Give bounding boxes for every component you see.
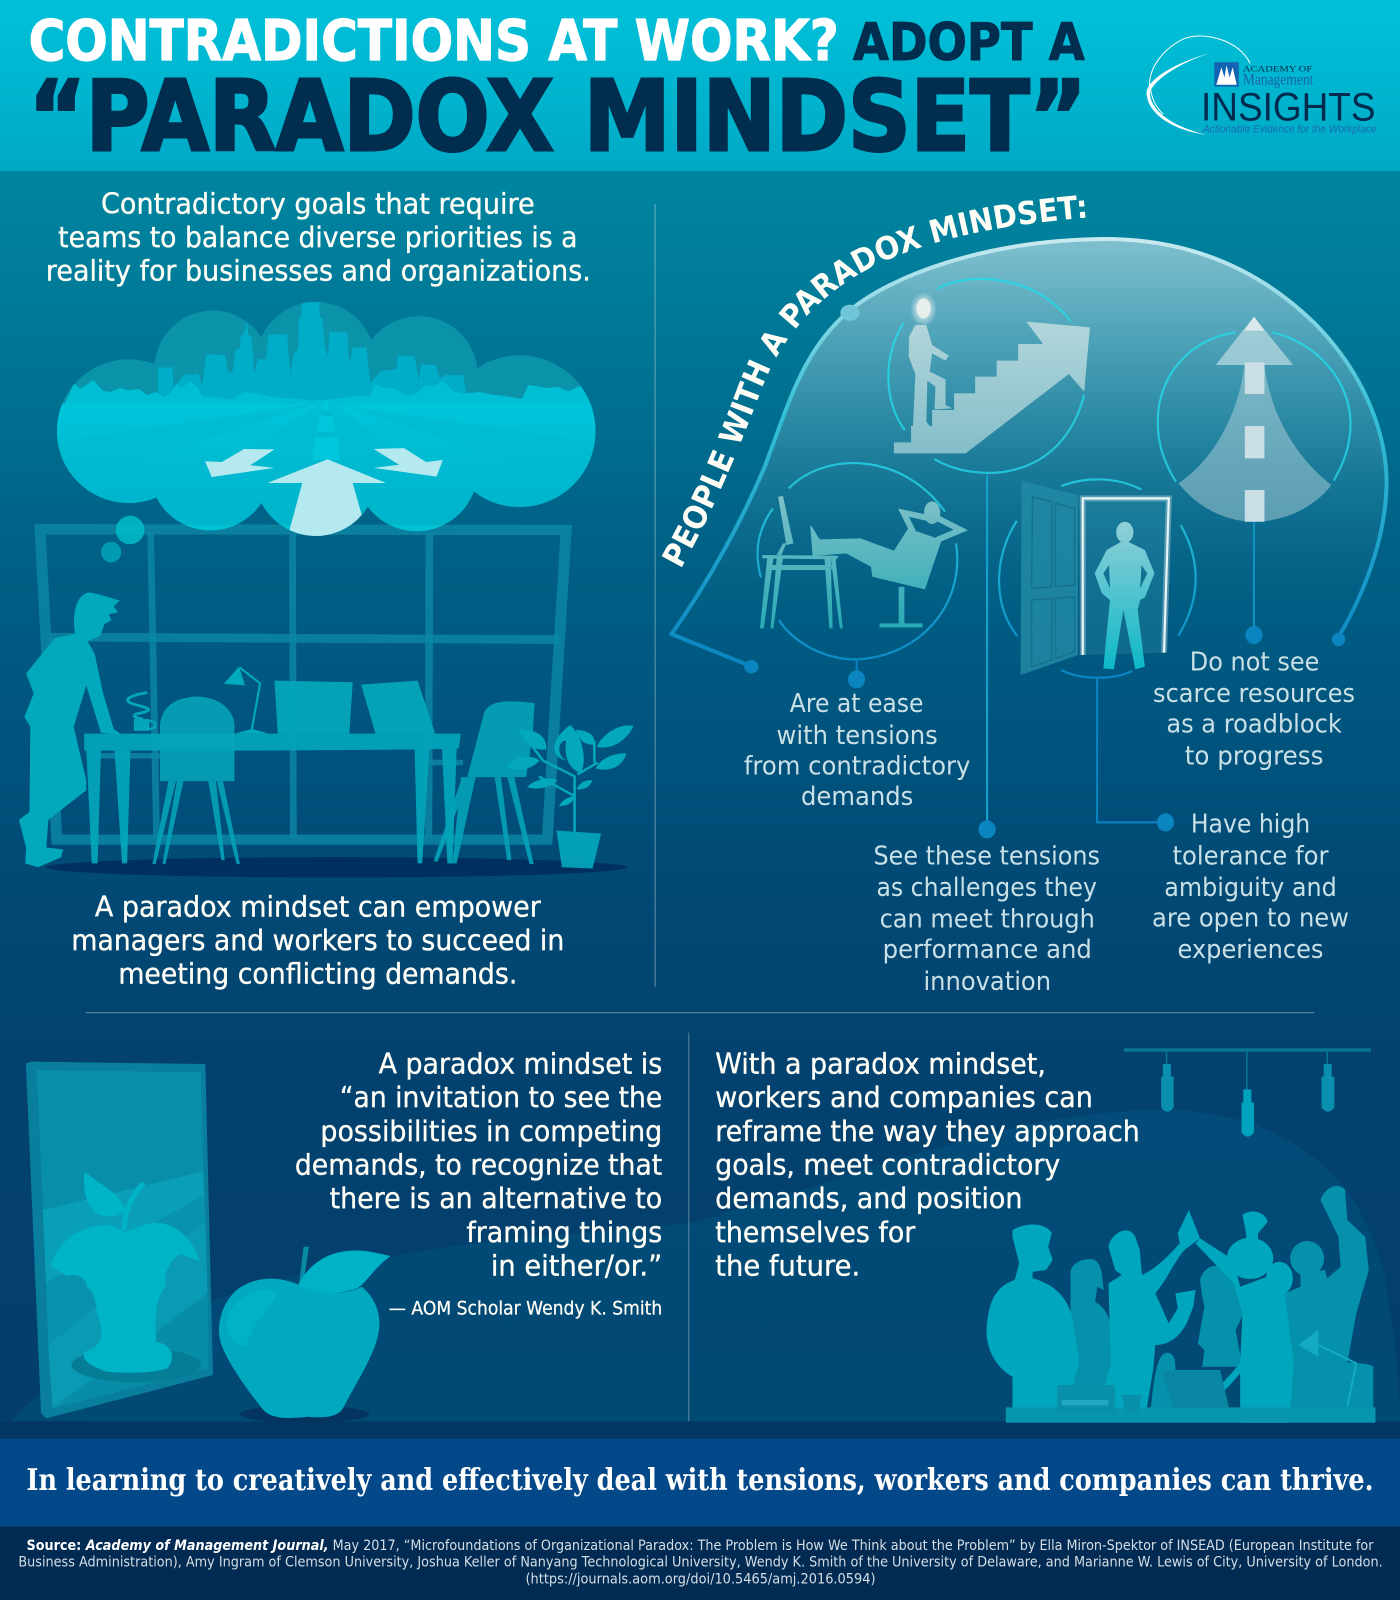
label: at ease	[744, 689, 970, 812]
thought bubble large	[116, 516, 144, 544]
logo: AOM Insights: ACADEMY OF	[1243, 64, 1313, 73]
panel: empower text: A paradox mindset can empower	[95, 889, 541, 923]
quote text	[295, 1046, 662, 1283]
thought bubble small	[101, 542, 121, 562]
source footer: (https://journals.aom.org/doi/10.5465/amj.2016.0594)	[526, 1572, 876, 1588]
curved heading: PEOPLE WITH A PARADOX MINDSET:	[662, 195, 1086, 568]
title paradox mindset: “PARADOX MINDSET”	[29, 60, 1087, 173]
reframe text: workers and companies can	[715, 1080, 1093, 1114]
logo: AOM Insights: INSIGHTS	[1201, 85, 1376, 129]
whole apple	[219, 1247, 391, 1418]
plant	[507, 725, 633, 868]
panel: contradictory goals intro text: teams to balance diverse priorities is a	[58, 220, 578, 254]
label: at ease: demands	[801, 782, 913, 812]
label: challenges: See these tensions	[873, 841, 1100, 871]
quote text: there is an alternative to	[330, 1181, 662, 1215]
table with laptop and books	[1006, 1330, 1375, 1423]
illustration: man in office thinking about the road	[19, 290, 633, 878]
ceiling lights	[1124, 1048, 1371, 1137]
connector lines	[857, 475, 1254, 829]
arrow: forward	[267, 459, 386, 543]
logo: AOM Insights: Actionable Evidence for the Workplace	[1202, 124, 1377, 136]
label: at ease: with tensions	[777, 721, 938, 751]
title adopt a: ADOPT A	[853, 13, 1085, 73]
label: scarce resources: scarce resources	[1153, 679, 1355, 709]
apple core reflection	[51, 1223, 200, 1373]
reframe text: With a paradox mindset,	[715, 1046, 1046, 1080]
banner	[0, 1439, 1400, 1527]
table	[84, 734, 461, 863]
label: scarce resources	[1153, 647, 1355, 771]
panel: contradictory goals intro text	[46, 186, 591, 288]
arrow: right	[374, 448, 443, 477]
header panel	[0, 0, 1400, 173]
reframe text	[715, 1046, 1140, 1283]
label: at ease: Are at ease	[790, 689, 923, 719]
quote attribution: — AOM Scholar Wendy K. Smith	[389, 1298, 662, 1319]
back figures	[1070, 1186, 1373, 1423]
man silhouette	[19, 592, 122, 867]
quote text: “an invitation to see the	[340, 1080, 662, 1114]
apple shadow	[240, 1405, 369, 1423]
panel: contradictory goals intro text: reality for businesses and organizations.	[46, 254, 591, 288]
label: ambiguity: are open to new	[1152, 904, 1349, 934]
arrow: left	[205, 449, 274, 477]
label: ambiguity: ambiguity and	[1164, 873, 1337, 903]
label: challenges: as challenges they	[877, 873, 1097, 903]
quote text: A paradox mindset is	[379, 1046, 662, 1080]
quote text: in either/or.”	[491, 1249, 662, 1283]
quote text: possibilities in competing	[320, 1114, 662, 1148]
head diagram	[672, 239, 1387, 838]
label: scarce resources: as a roadblock	[1166, 710, 1342, 740]
label: ambiguity: Have high	[1191, 810, 1310, 840]
tree line	[63, 380, 598, 407]
thought cloud	[56, 302, 596, 536]
icon: door with man in doorway	[1021, 481, 1169, 675]
icon: man climbing stair arrow with light bulb	[894, 292, 1090, 453]
panel: empower text	[71, 889, 564, 991]
left chair	[152, 696, 240, 864]
connector nodes	[744, 305, 1345, 838]
head outline	[672, 239, 1387, 666]
quote text: demands, to recognize that	[295, 1147, 662, 1181]
logo: AOM Insights	[1147, 36, 1377, 136]
source footer	[0, 1527, 1400, 1600]
icon: road arrow	[1178, 317, 1331, 522]
reframe text: demands, and position	[715, 1181, 1022, 1215]
label: scarce resources: Do not see	[1190, 647, 1319, 677]
label: challenges: can meet through	[880, 905, 1095, 935]
road ground	[42, 404, 610, 538]
panel: empower text: managers and workers to succeed in	[71, 923, 564, 957]
right chair	[434, 701, 535, 864]
label: challenges: innovation	[923, 967, 1051, 997]
label: ambiguity: experiences	[1178, 935, 1323, 965]
floor shadow	[46, 857, 627, 878]
label: at ease: from contradictory	[744, 751, 970, 781]
label: scarce resources: to progress	[1185, 741, 1323, 771]
logo: AOM Insights: Management	[1243, 72, 1314, 89]
city skyline	[158, 302, 467, 405]
label: ambiguity	[1152, 810, 1349, 965]
reframe text: goals, meet contradictory	[715, 1147, 1060, 1181]
label: challenges: performance and	[883, 935, 1092, 965]
panel: people with a paradox mindset	[662, 195, 1388, 997]
reframe text: the future.	[715, 1249, 860, 1283]
laptops	[274, 681, 435, 734]
label: challenges	[873, 841, 1100, 997]
mirror	[26, 1062, 213, 1418]
coffee mug	[128, 693, 156, 731]
label: ambiguity: tolerance for	[1172, 841, 1329, 871]
front figures	[987, 1210, 1294, 1423]
circle arcs	[758, 279, 1351, 678]
main background	[0, 171, 1400, 1439]
reframe text: themselves for	[715, 1215, 916, 1249]
panel: empower text: meeting conflicting demands.	[118, 957, 517, 991]
illustration: mirror with eaten apple and whole apple	[26, 1062, 391, 1423]
title line one: CONTRADICTIONS AT WORK?	[29, 9, 839, 74]
reframe text: reframe the way they approach	[715, 1114, 1140, 1148]
lower hill background	[11, 1109, 1400, 1422]
quote text: framing things	[466, 1215, 662, 1249]
desk lamp	[224, 666, 269, 734]
panel: contradictory goals intro text: Contradictory goals that require	[101, 186, 535, 220]
window frame	[40, 529, 566, 840]
illustration: team celebrating	[987, 1048, 1375, 1423]
icon: relaxed man with feet on desk	[760, 496, 961, 628]
